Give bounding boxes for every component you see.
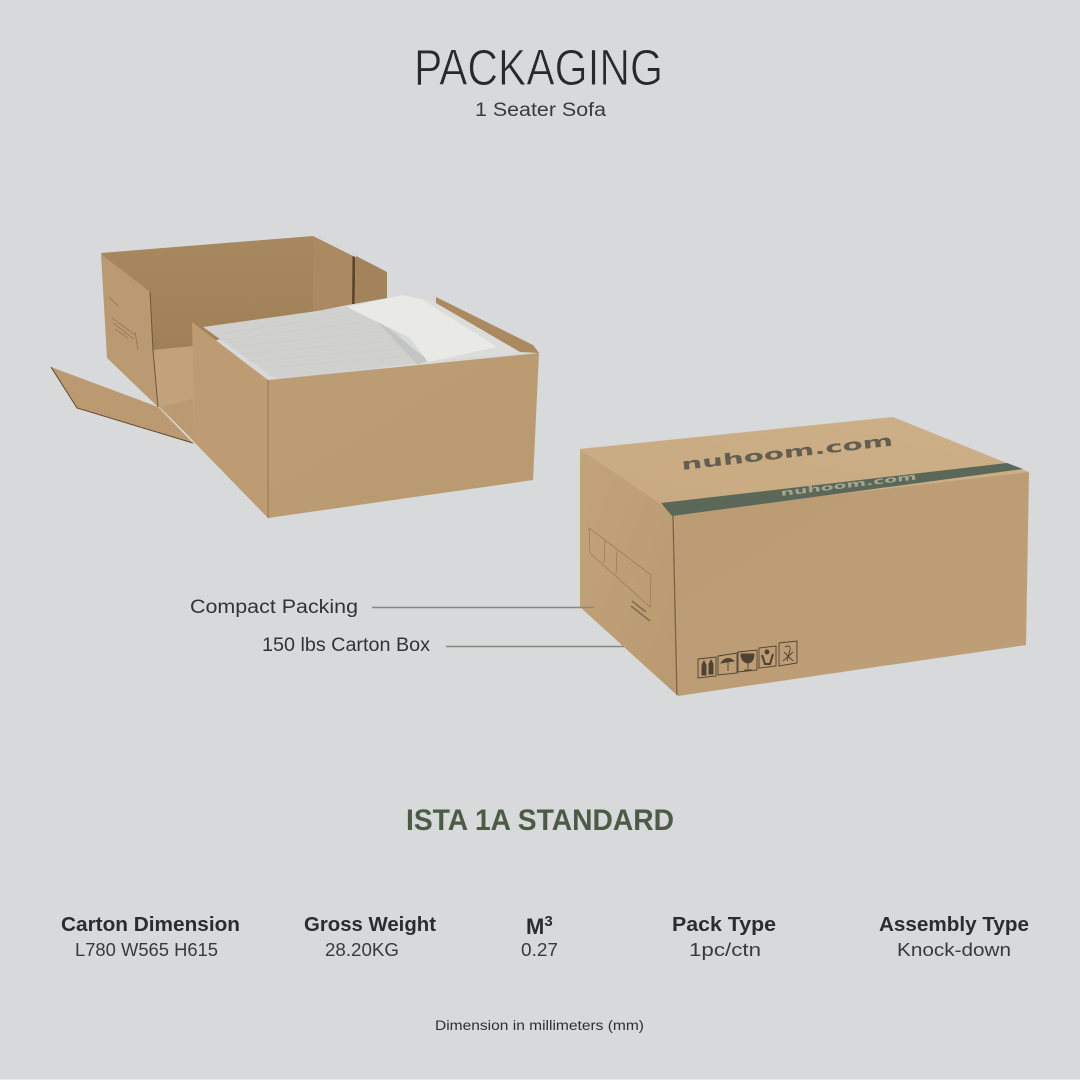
spec: pack type: 1pc/ctn: [689, 940, 761, 960]
fabric stripes: [222, 315, 420, 368]
floor flap: [51, 367, 193, 443]
spec: cubic metres: M: [526, 914, 544, 939]
spec: gross weight: Gross Weight: [304, 913, 436, 936]
illustration: open carton with packed sofa: [51, 236, 539, 518]
callout: carton box: 150 lbs Carton Box: [262, 635, 431, 656]
logo on top: nuhoom.com: [680, 431, 894, 474]
spec: carton dimension: Carton Dimension: [61, 913, 240, 936]
callout: compact packing: Compact Packing: [190, 597, 358, 618]
corner seam: [673, 516, 677, 695]
front corner edge: [267, 380, 269, 518]
spec: gross weight: 28.20KG: [325, 940, 399, 960]
spec: assembly type: Knock-down: [897, 940, 1011, 960]
left side panel: [101, 254, 158, 407]
spec: cubic metres: 3: [544, 913, 553, 930]
icon: no hooks: [779, 641, 797, 666]
spec: assembly type: [879, 913, 1029, 960]
spec: cubic metres: [521, 913, 558, 960]
green tape: [661, 463, 1023, 516]
icon: this way up: [698, 657, 716, 678]
spec: pack type: Pack Type: [672, 913, 776, 936]
grey sofa fabric: [203, 307, 428, 380]
front left panel: [192, 322, 268, 518]
right inner wall: [313, 236, 353, 312]
spec: carton dimension: L780 W565 H615: [75, 940, 218, 960]
heading: standard: ISTA 1A STANDARD: [406, 804, 674, 837]
illustration: closed carton: [580, 417, 1029, 696]
handling icons: [698, 641, 797, 678]
side panel torn edge: [150, 292, 158, 407]
front panel: [268, 353, 539, 518]
icon: fragile: [738, 650, 757, 672]
footnote: Dimension in millimeters (mm): [435, 1018, 644, 1033]
left face: [580, 449, 678, 696]
translucent wrap wedge: [403, 295, 520, 362]
side printed label: [589, 528, 651, 607]
logo on tape: nuhoom.com: [780, 471, 917, 498]
printed label on left panel: [109, 297, 138, 350]
front face: [674, 472, 1029, 696]
spec: pack type: [672, 913, 776, 960]
white sofa wrapping: [347, 295, 497, 362]
icon: keep dry: [718, 653, 737, 675]
title: PACKAGING: [414, 39, 663, 96]
box floor: [153, 346, 196, 443]
back inner wall: [101, 236, 313, 351]
subtitle: 1 Seater Sofa: [475, 100, 606, 121]
spec: carton dimension: [61, 913, 240, 960]
flap gap: [352, 256, 356, 304]
fabric fold shadow: [372, 316, 428, 365]
spec: assembly type: Assembly Type: [879, 913, 1029, 936]
spec: cubic metres: 0.27: [521, 940, 558, 960]
icon: handle with care: [759, 646, 776, 668]
right outer flap: [354, 256, 387, 304]
top face: [580, 417, 1029, 513]
spec: gross weight: [304, 913, 436, 960]
far flap: [436, 297, 539, 353]
side barcode: [631, 601, 650, 621]
